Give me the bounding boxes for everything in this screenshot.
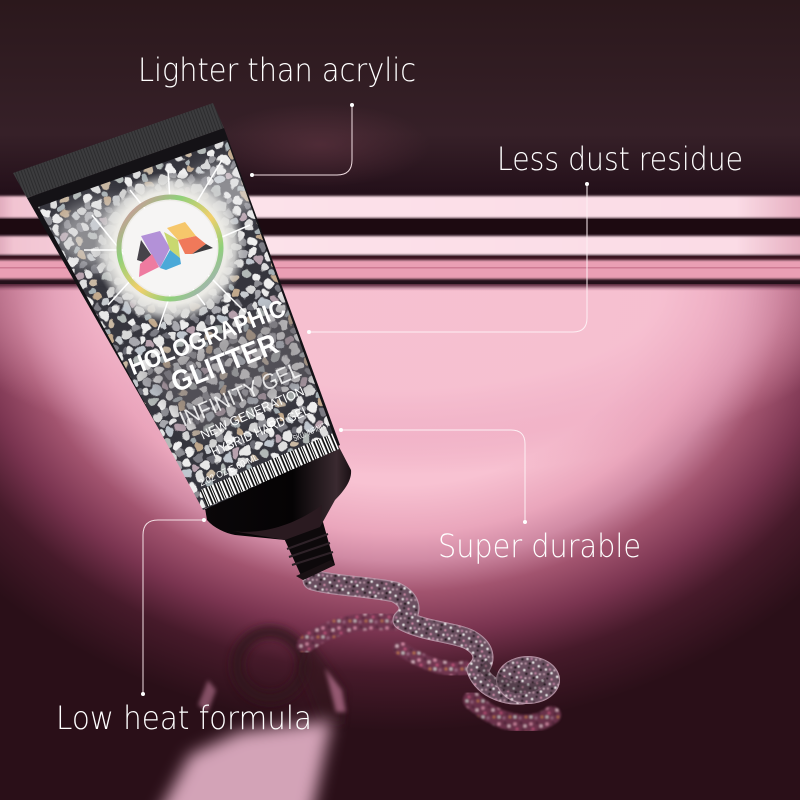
tube title text: SKU: INFINITY	[291, 419, 330, 443]
tube title text: HOLOGRAPHIC	[125, 295, 290, 381]
callout: lighter than acrylic: Lighter than acrylic	[138, 51, 416, 89]
tube title text	[125, 295, 330, 489]
glitter gel squiggle	[313, 580, 560, 704]
callout: less dust residue	[307, 140, 743, 334]
tube title text: 2.02 OZ E 60 ML	[198, 452, 260, 489]
tube cap	[13, 103, 224, 198]
callout: super durable: Super durable	[438, 527, 641, 565]
tube base	[205, 445, 351, 540]
callout: lighter than acrylic	[138, 51, 416, 177]
product tube	[13, 103, 360, 580]
tube title text: HYBRID HARD GEL	[209, 402, 312, 459]
glitter squiggle reflection	[305, 621, 552, 724]
callout: less dust residue: Less dust residue	[497, 140, 743, 178]
callout: low heat formula: Low heat formula	[56, 699, 312, 737]
tube reflection on surface	[150, 632, 346, 800]
tube title text: GLITTER	[167, 328, 283, 399]
tube nozzle	[283, 522, 335, 580]
tube body	[27, 128, 340, 510]
tube title text: INFINITY GEL	[175, 357, 305, 432]
callout: low heat formula	[56, 518, 312, 737]
tube title text: NEW GENERATION	[198, 383, 306, 443]
barcode strip	[200, 433, 339, 507]
callout: super durable	[339, 428, 641, 565]
logo badge	[119, 197, 221, 299]
